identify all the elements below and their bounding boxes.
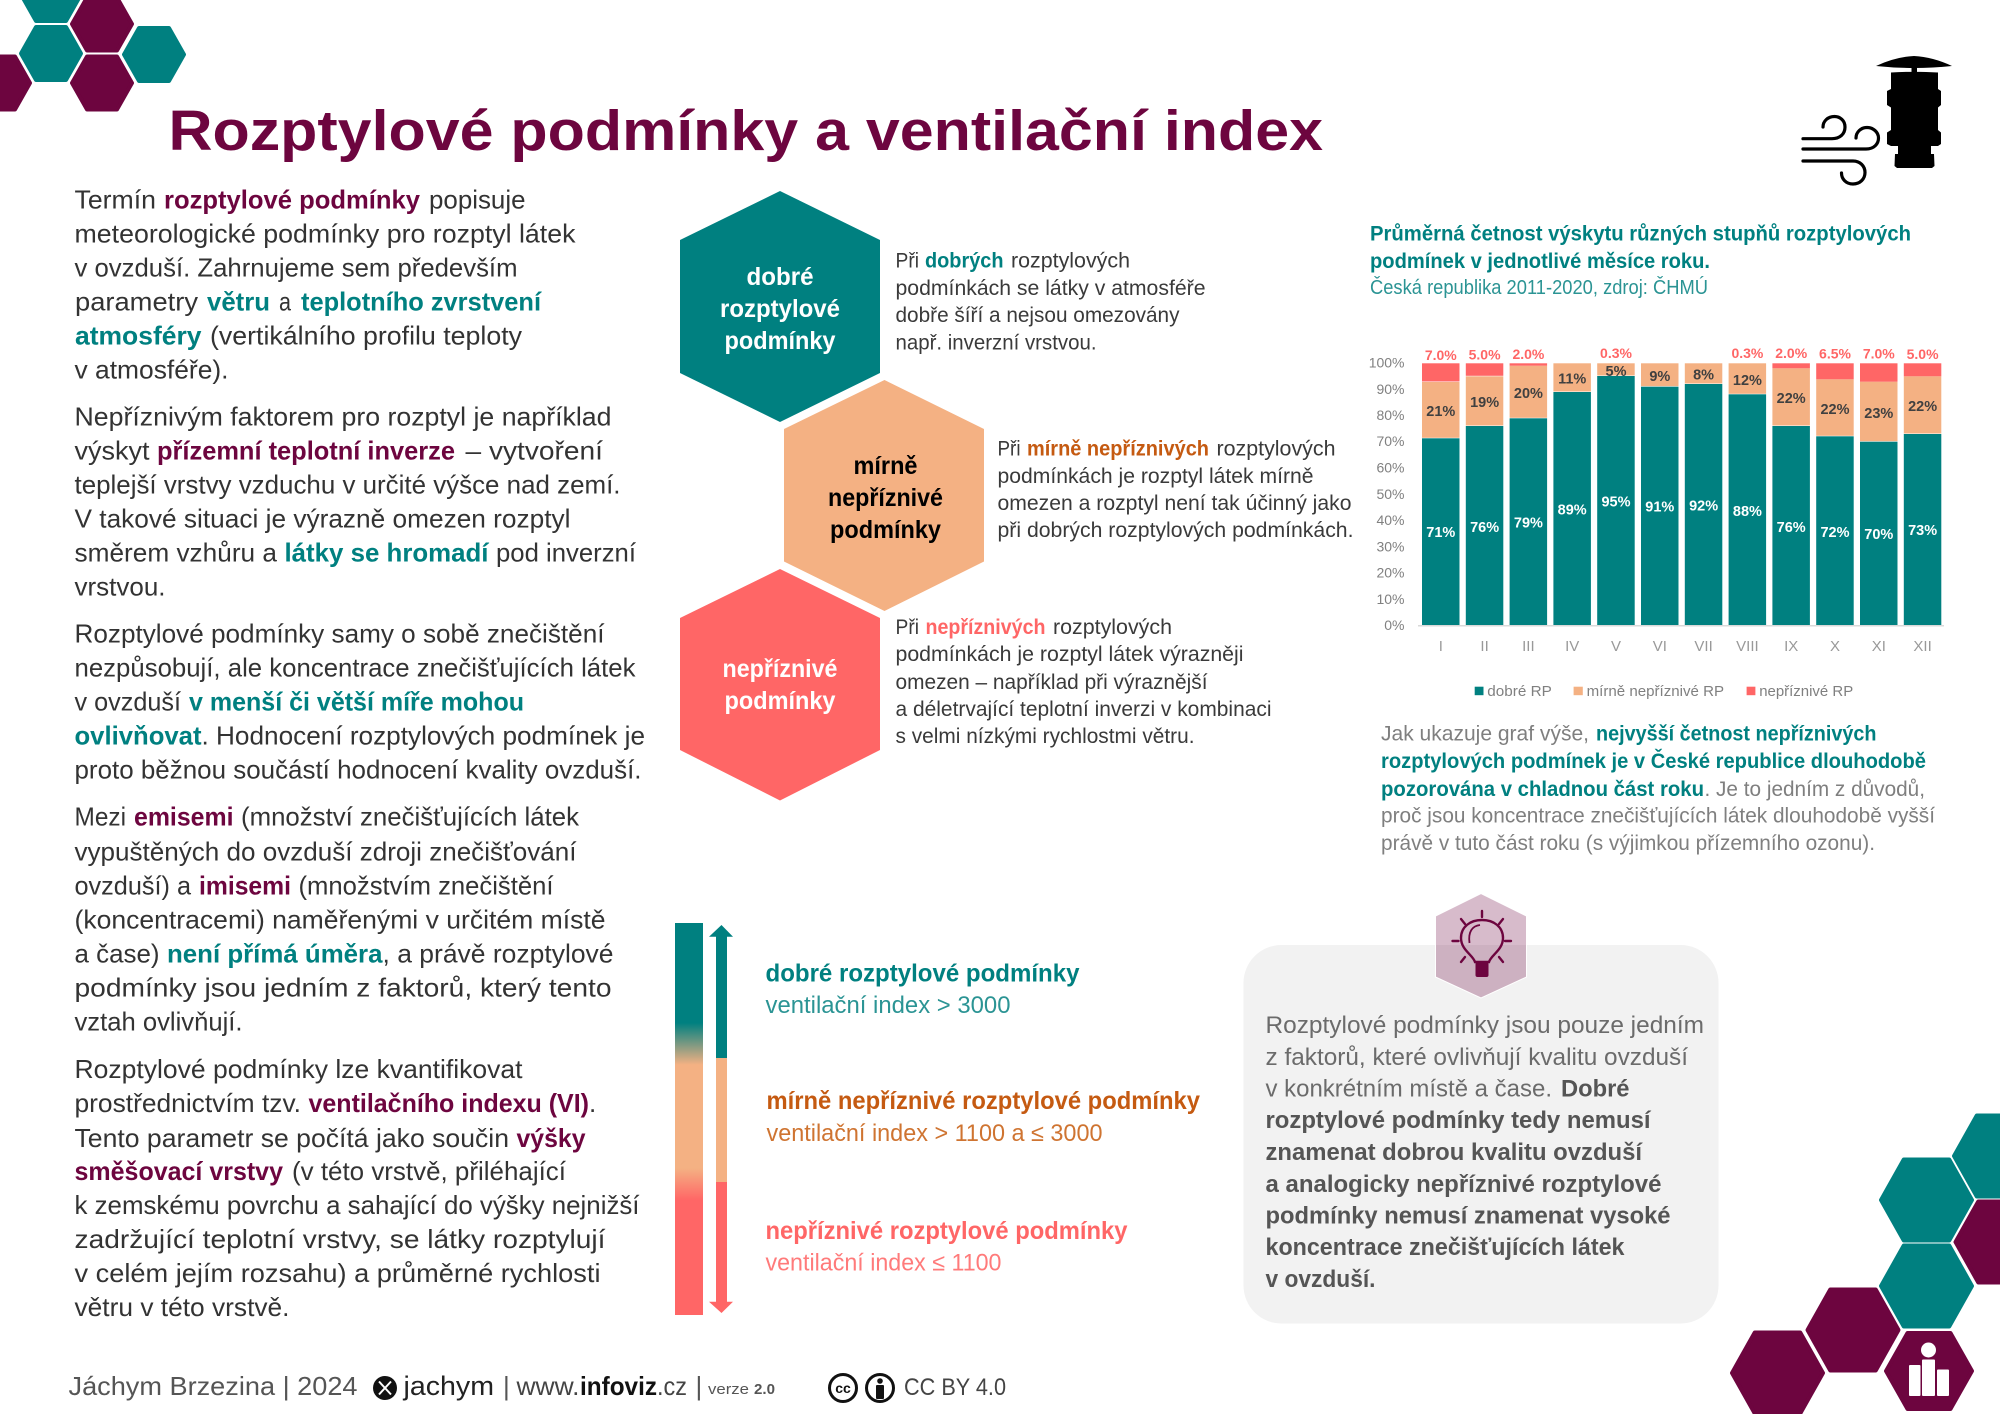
note text: rozptylové podmínky tedy nemusí [1266,1107,1652,1134]
scale label: dobré: dobré rozptylové podmínky [766,960,1080,988]
chart commentary: právě v tuto část roku (s výjimkou přízemního ozonu). [1381,832,1875,855]
text: mírně nepříznivé podmínky: mírně nepříznivých [1027,438,1209,460]
hexagon: nepříznivé podmínky [680,569,880,800]
labels: mírně nepříznivé RP: 21% [1426,404,1455,420]
icon: CC: cc [835,1380,851,1396]
paragraph: vliv na koncentrace: proto běžnou součástí hodnocení kvality ovzduší. [74,754,642,784]
footer: infoviz [580,1371,657,1401]
icon: infoviz logo [1886,1333,1972,1409]
scale label: nepříznivé [766,1217,1128,1276]
labels: nepříznivé RP: 5.0% [1907,346,1939,362]
labels: dobré RP: 89% [1558,502,1587,518]
chart commentary: rozptylových podmínek je v České republice dlouhodobě [1381,749,1926,773]
text: dobré podmínky: např. inverzní vrstvou. [896,332,1096,354]
paragraph: rozptylové podmínky: meteorologické podmínky pro rozptyl látek [74,218,577,248]
scale label: nepříznivé: nepříznivé rozptylové podmínky [766,1217,1128,1245]
text: dobré podmínky [896,250,1206,354]
text: mírně nepříznivé podmínky: omezen a rozptyl není tak účinný jako [998,492,1352,515]
labels: mírně nepříznivé RP: 9% [1649,369,1670,385]
labels: dobré RP: 95% [1601,494,1631,510]
x axis labels: XI [1872,638,1886,655]
labels: dobré RP: 88% [1733,504,1762,520]
icon: light bulb [1436,894,1526,998]
hexagon: dobré rozptylové podmínky [680,191,880,422]
paragraph: emise a imise: a čase) [74,938,160,968]
labels: nepříznivé RP: 2.0% [1775,345,1808,361]
text: dobré podmínky: Při [896,250,919,272]
paragraph: přízemní inverze: vrstvou. [74,572,166,602]
paragraph: přízemní inverze: směrem vzhůru a [74,538,278,568]
labels: mírně nepříznivé RP: 22% [1908,399,1937,415]
paragraph: emise a imise: (množství znečišťujících látek [241,802,580,832]
paragraph: vliv na koncentrace: . Hodnocení rozptylových podmínek je [202,720,645,750]
text: dobré podmínky: rozptylových [1011,250,1130,272]
scale label: mírně nepříznivé: ventilační index > 1100 a ≤ 3000 [766,1120,1102,1147]
text: nepříznivé podmínky: nepříznivých [926,616,1046,639]
decoration: bottom-right hexagons [1732,1116,2000,1414]
y axis labels: 70% [1376,433,1404,449]
paragraph: přízemní inverze: – vytvoření [466,436,604,466]
chart commentary: Jak ukazuje graf výše, [1381,722,1589,746]
footer: CC BY 4.0 [904,1374,1006,1401]
y axis labels: 100% [1369,354,1404,370]
paragraph: rozptylové podmínky: v atmosféře). [74,354,228,384]
labels: mírně nepříznivé RP: 12% [1733,373,1762,389]
title: Rozptylové podmínky a ventilační index [168,99,1323,163]
icon: X [373,1376,397,1400]
labels: mírně nepříznivé RP: 22% [1777,391,1806,407]
icon: BY [866,1374,894,1402]
labels: nepříznivé RP [1425,345,1939,363]
paragraph: rozptylové podmínky: (vertikálního profilu teploty [210,320,522,350]
scale label: mírně nepříznivé [766,1087,1200,1147]
left column text [74,184,645,1322]
footer: jachym [402,1371,494,1401]
paragraph: vliv na koncentrace: ovlivňovat [74,720,202,750]
y axis labels: 40% [1376,512,1404,528]
text: mírně nepříznivé podmínky: podmínkách je rozptyl látek mírně [998,465,1314,488]
labels: mírně nepříznivé RP: 19% [1470,395,1499,411]
footer: www. [515,1371,580,1401]
footer: verze [708,1381,749,1398]
paragraph: přízemní inverze: Nepříznivým faktorem pro rozptyl je například [74,402,612,432]
paragraph: rozptylové podmínky: parametry [75,286,198,316]
text: dobré podmínky: podmínkách se látky v atmosféře [896,277,1206,300]
paragraph: ventilační index [74,1054,640,1322]
labels: nepříznivé RP: 0.3% [1731,345,1764,361]
footer: | [503,1371,510,1401]
y axis labels: 20% [1376,564,1404,580]
legend: nepříznivé RP [1759,683,1853,700]
paragraph: rozptylové podmínky: rozptylové podmínky [164,184,421,214]
paragraph: rozptylové podmínky: popisuje [429,184,526,214]
labels: dobré RP: 71% [1426,525,1455,541]
paragraph: ventilační index: Tento parametr se počítá jako součin [74,1123,509,1153]
paragraph: rozptylové podmínky: Termín [74,184,156,214]
text: mírně nepříznivé podmínky [998,438,1354,542]
labels: dobré RP: 91% [1645,500,1674,516]
paragraph: ventilační index: (v této vrstvě, přiléhající [292,1156,567,1186]
paragraph: vliv na koncentrace: v ovzduší [74,686,182,716]
labels: mírně nepříznivé RP: 23% [1864,406,1893,422]
labels: mírně nepříznivé RP [1426,364,1937,422]
paragraph: přízemní inverze: V takové situaci je výrazně omezen rozptyl [74,504,570,534]
footer: Jáchym Brzezina | 2024 [68,1371,358,1401]
footer [68,1371,1006,1402]
paragraph: emise a imise: vztah ovlivňují. [74,1006,242,1036]
paragraph: emise a imise: Mezi [74,802,126,832]
y axis labels [1369,354,1404,633]
x axis labels [1439,638,1932,655]
text: nepříznivé podmínky: omezen – například při výraznější [896,671,1208,694]
hexagon: mírně nepříznivé podmínky: podmínky [830,516,941,544]
chart commentary: . Je to jedním z důvodů, [1704,778,1925,801]
arrow: ventilation scale [709,925,733,1313]
paragraph: rozptylové podmínky: v ovzduší. Zahrnujeme sem především [74,252,518,282]
stacked bars [1418,363,1944,626]
x axis labels: X [1830,638,1840,655]
decoration: top-left hexagons [0,0,184,110]
paragraph: ventilační index: Rozptylové podmínky lze kvantifikovat [74,1054,523,1084]
paragraph: ventilační index: prostřednictvím tzv. [74,1088,301,1118]
paragraph: vliv na koncentrace: Rozptylové podmínky samy o sobě znečištění [74,618,605,648]
note text: znamenat dobrou kvalitu ovzduší [1266,1139,1643,1166]
paragraph: emise a imise: vypuštěných do ovzduší zdroji znečišťování [74,836,577,866]
note text [1266,1012,1704,1293]
footer: .cz [657,1371,687,1401]
paragraph: přízemní inverze: výskyt [74,436,150,466]
paragraph: emise a imise [74,802,614,1036]
paragraph: emise a imise: , a právě rozptylové [382,938,614,968]
scale label: dobré: ventilační index > 3000 [766,992,1010,1019]
legend [1475,683,1853,700]
hexagon: mírně nepříznivé podmínky: mírně [854,452,918,480]
labels: dobré RP: 72% [1820,525,1850,541]
bar chart: monthly frequency [1369,345,1944,700]
paragraph: přízemní inverze: přízemní teplotní inverze [157,436,455,466]
labels: mírně nepříznivé RP: 22% [1820,402,1850,418]
paragraph: ventilační index: ventilačního indexu (VI) [308,1088,589,1118]
chart heading: Průměrná četnost výskytu různých stupňů rozptylových [1370,222,1911,246]
y axis labels: 10% [1376,591,1404,607]
x axis labels: II [1480,638,1489,655]
x axis labels: IV [1565,638,1579,655]
labels: nepříznivé RP: 7.0% [1863,346,1895,362]
note text: v ovzduší. [1266,1266,1376,1293]
note text: podmínky nemusí znamenat vysoké [1266,1202,1670,1230]
legend: dobré RP [1487,683,1552,700]
paragraph: emise a imise: (množstvím znečištění [298,870,554,900]
paragraph: přízemní inverze: pod inverzní [496,538,637,568]
paragraph: vliv na koncentrace [74,618,645,784]
labels: nepříznivé RP: 2.0% [1512,346,1545,362]
paragraph: přízemní inverze: látky se hromadí [284,538,489,568]
hexagon: nepříznivé podmínky: nepříznivé [722,655,838,683]
labels: mírně nepříznivé RP: 5% [1606,364,1627,380]
x axis labels: VIII [1736,638,1759,655]
paragraph: rozptylové podmínky: teplotního zvrstvení [301,286,542,316]
labels: nepříznivé RP: 5.0% [1469,346,1501,362]
panel: note [1244,894,1718,1324]
labels: mírně nepříznivé RP: 20% [1514,386,1543,402]
text: dobré podmínky: dobrých [925,250,1004,272]
paragraph: ventilační index: směšovací vrstvy [74,1156,284,1186]
hexagon: dobré rozptylové podmínky: rozptylové [720,295,840,323]
paragraph: vliv na koncentrace: nezpůsobují, ale koncentrace znečišťujících látek [74,652,636,682]
chart heading [1370,222,1911,299]
paragraph: emise a imise: emisemi [134,802,234,832]
text: nepříznivé podmínky [896,616,1272,748]
paragraph: emise a imise: imisemi [199,870,291,900]
hexagon: mírně nepříznivé podmínky [784,380,984,611]
chart heading: podmínek v jednotlivé měsíce roku. [1370,250,1710,273]
paragraph: ventilační index: v celém jejím rozsahu) a průměrné rychlosti [74,1258,600,1288]
icon: wind and chimney [1803,56,1952,184]
scale label: nepříznivé: ventilační index ≤ 1100 [766,1250,1002,1276]
paragraph: emise a imise: není přímá úměra [167,938,383,968]
legend: mírně nepříznivé RP [1587,683,1724,700]
y axis labels: 30% [1376,538,1404,554]
y axis labels: 50% [1376,486,1404,502]
paragraph: emise a imise: ovzduší) a [74,870,192,900]
labels: dobré RP: 76% [1777,520,1806,536]
note text: v konkrétním místě a čase. [1266,1076,1552,1102]
gradient scale bar [675,923,703,1315]
labels: dobré RP [1426,494,1937,543]
note text: a analogicky nepříznivé rozptylové [1266,1171,1662,1198]
x axis labels: VI [1653,638,1667,655]
labels: dobré RP: 79% [1514,516,1543,532]
x axis labels: XII [1913,638,1932,655]
footer: 2.0 [754,1381,775,1398]
icon: CC [830,1374,856,1402]
text: nepříznivé podmínky: Při [896,616,919,639]
note text: Dobré [1561,1076,1630,1102]
chart commentary: proč jsou koncentrace znečišťujících látek dlouhodobě vyšší [1381,804,1935,828]
paragraph: rozptylové podmínky: větru [207,286,270,316]
labels: dobré RP: 73% [1908,523,1937,539]
text: nepříznivé podmínky: a déletrvající teplotní inverzi v kombinaci [896,698,1272,721]
hexagon: nepříznivé podmínky: podmínky [724,687,836,715]
labels: nepříznivé RP: 7.0% [1425,347,1457,363]
scale label: mírně nepříznivé: mírně nepříznivé rozptylové podmínky [766,1087,1200,1115]
x axis labels: VII [1694,638,1713,655]
x axis labels: III [1522,638,1535,655]
y axis labels: 0% [1384,617,1404,633]
note text: koncentrace znečišťujících látek [1266,1234,1625,1261]
paragraph: rozptylové podmínky: a [279,286,291,316]
paragraph: přízemní inverze [74,402,637,602]
scale label: dobré [766,960,1080,1019]
paragraph: ventilační index: . [589,1088,596,1118]
labels: dobré RP: 92% [1689,498,1718,514]
paragraph: rozptylové podmínky: atmosféry [75,320,202,350]
text: dobré podmínky: dobře šíří a nejsou omezovány [896,304,1180,327]
labels: mírně nepříznivé RP: 8% [1693,368,1714,384]
note text: Rozptylové podmínky jsou pouze jedním [1266,1012,1704,1039]
paragraph: ventilační index: zadržující teplotní vrstvy, se látky rozptylují [74,1224,606,1254]
labels: dobré RP: 70% [1864,527,1893,543]
chart commentary: nejvyšší četnost nepříznivých [1596,722,1876,746]
chart commentary: pozorována v chladnou část roku [1381,778,1704,801]
chart commentary [1381,722,1935,855]
text: mírně nepříznivé podmínky: Při [998,438,1020,460]
text: nepříznivé podmínky: rozptylových [1053,616,1172,639]
text: mírně nepříznivé podmínky: rozptylových [1216,438,1336,460]
labels: dobré RP: 76% [1470,520,1499,536]
paragraph: přízemní inverze: teplejší vrstvy vzduchu v určité výšce nad zemí. [74,470,620,500]
text: nepříznivé podmínky: s velmi nízkými rychlostmi větru. [896,725,1194,748]
note text: z faktorů, které ovlivňují kvalitu ovzduší [1266,1044,1688,1071]
paragraph: ventilační index: větru v této vrstvě. [74,1292,290,1322]
paragraph: rozptylové podmínky [74,184,577,384]
x axis labels: I [1439,638,1443,655]
y axis labels: 90% [1376,381,1404,397]
hexagon: mírně nepříznivé podmínky: nepříznivé [828,484,943,512]
labels: nepříznivé RP: 0.3% [1600,345,1633,361]
paragraph: ventilační index: výšky [516,1123,586,1153]
paragraph: vliv na koncentrace: v menší či větší míře mohou [189,686,524,716]
x axis labels: IX [1784,638,1798,655]
chart heading: Česká republika 2011-2020, zdroj: ČHMÚ [1370,276,1708,299]
hexagon: dobré rozptylové podmínky: dobré [746,263,814,291]
paragraph: emise a imise: (koncentracemi) naměřenými v určitém místě [74,904,606,934]
labels: mírně nepříznivé RP: 11% [1558,372,1586,388]
paragraph: emise a imise: podmínky jsou jedním z faktorů, který tento [74,972,612,1002]
labels: nepříznivé RP: 6.5% [1819,346,1852,362]
hexagon: dobré rozptylové podmínky: podmínky [724,327,836,355]
paragraph: ventilační index: k zemskému povrchu a sahající do výšky nejnižší [74,1190,640,1220]
x axis labels: V [1611,638,1621,655]
text: mírně nepříznivé podmínky: při dobrých rozptylových podmínkách. [998,519,1354,542]
y axis labels: 60% [1376,460,1404,476]
footer: | [696,1371,702,1401]
text: nepříznivé podmínky: podmínkách je rozptyl látek výrazněji [896,643,1244,666]
y axis labels: 80% [1376,407,1404,423]
